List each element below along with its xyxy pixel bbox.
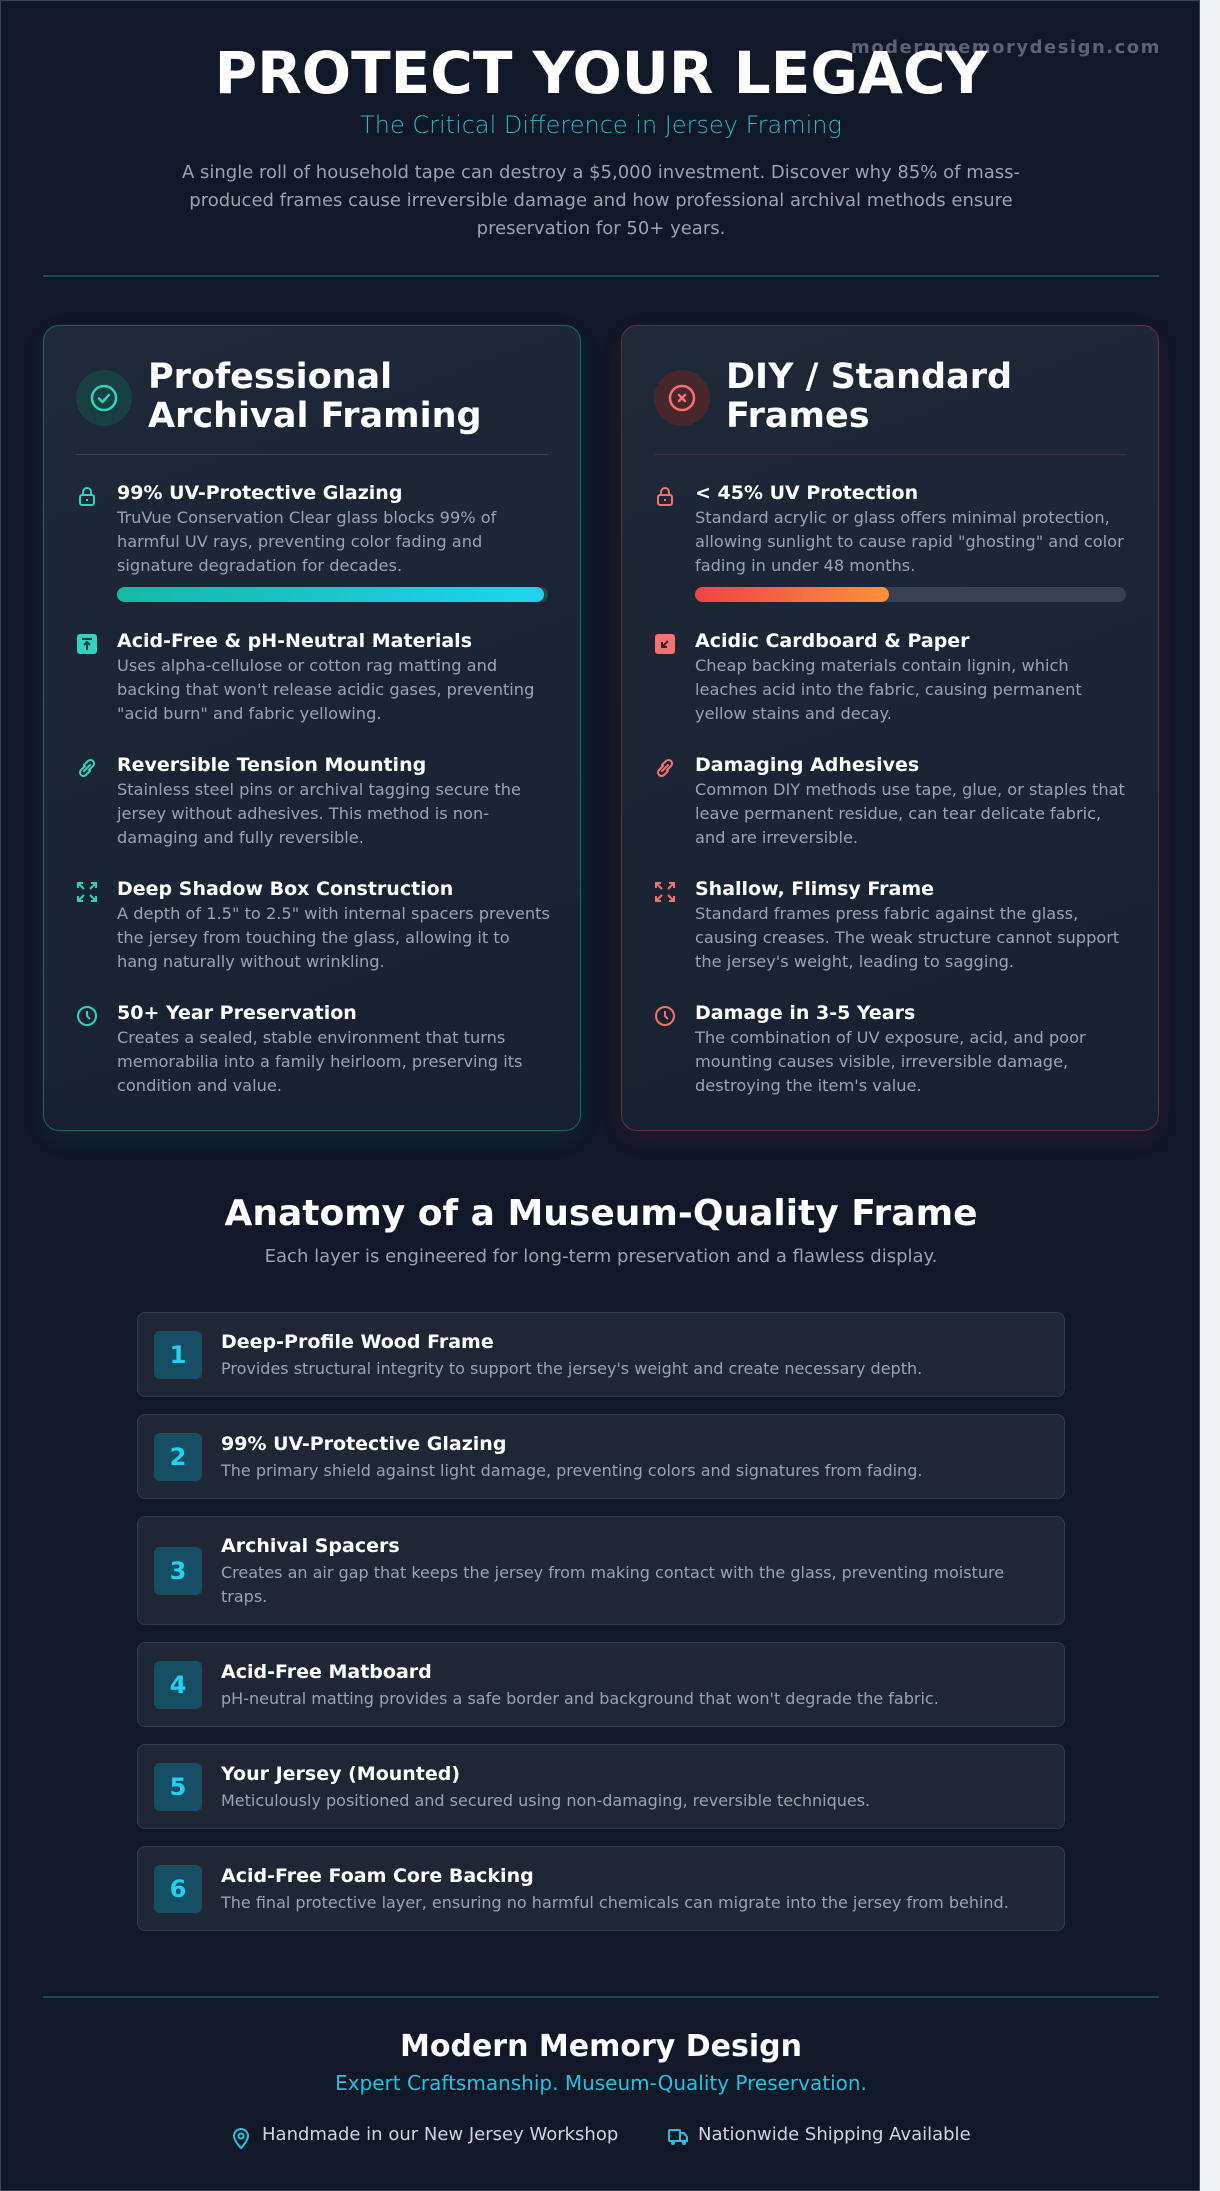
item: shadow box: A depth of 1.5" to 2.5" with internal spacers prevents the jersey from touching the glass, allowing it to hang naturally without wrinkling. xyxy=(117,904,550,971)
layer 1: Deep-Profile Wood Frame xyxy=(221,1331,494,1353)
icon: truck xyxy=(668,2129,688,2145)
item: UV glazing: 99% UV-Protective Glazing xyxy=(117,482,402,504)
layer 2 xyxy=(137,1414,1065,1499)
layer 2: 2 xyxy=(170,1443,186,1471)
layer 6 xyxy=(137,1846,1065,1931)
layer 5: Your Jersey (Mounted) xyxy=(221,1763,460,1785)
item: UV glazing: TruVue Conservation Clear glass blocks 99% of harmful UV rays, preventing color fading and signature degradation for decades. xyxy=(117,508,496,575)
icon: x circle xyxy=(654,370,710,426)
icon: check circle xyxy=(76,370,132,426)
layer 2: The primary shield against light damage, preventing colors and signatures from fading. xyxy=(221,1461,922,1480)
footer info row xyxy=(233,2124,971,2150)
item: adhesives: Damaging Adhesives xyxy=(695,754,919,776)
footer info row: Nationwide Shipping Available xyxy=(698,2124,971,2145)
subtitle: The Critical Difference in Jersey Framing xyxy=(360,111,842,139)
layer 6: 6 xyxy=(170,1875,186,1903)
heading: Frames xyxy=(726,396,870,436)
layer 6: The final protective layer, ensuring no harmful chemicals can migrate into the jersey from behind. xyxy=(221,1893,1009,1912)
layer 4: 4 xyxy=(170,1671,186,1699)
heading: Professional xyxy=(148,357,392,397)
item: 50 year: 50+ Year Preservation xyxy=(117,1002,357,1024)
layer 5: Meticulously positioned and secured using non-damaging, reversible techniques. xyxy=(221,1791,870,1810)
layer 4 xyxy=(137,1642,1065,1727)
footer tagline: Expert Craftsmanship. Museum-Quality Preservation. xyxy=(335,2071,867,2095)
panel: professional archival framing xyxy=(43,325,581,1131)
item: 50 year xyxy=(77,1002,522,1095)
layer 3 xyxy=(137,1516,1065,1625)
item: shadow box: Deep Shadow Box Construction xyxy=(117,878,453,900)
item: adhesives: Common DIY methods use tape, glue, or staples that leave permanent residue, can tear delicate fabric, and are irreversible. xyxy=(695,780,1125,847)
item: tension mounting xyxy=(79,754,521,847)
progress bar: 45% xyxy=(695,587,1126,602)
layer 3: Archival Spacers xyxy=(221,1535,400,1557)
layer 1 xyxy=(137,1312,1065,1397)
item: low UV: < 45% UV Protection xyxy=(695,482,918,504)
layer 6: Acid-Free Foam Core Backing xyxy=(221,1865,534,1887)
item: acid-free: Acid-Free & pH-Neutral Materials xyxy=(117,630,472,652)
item: flimsy frame: Shallow, Flimsy Frame xyxy=(695,878,934,900)
item: UV glazing xyxy=(79,482,497,575)
item: flimsy frame: Standard frames press fabric against the glass, causing creases. The weak structure cannot support the jersey's weight, leading to sagging. xyxy=(695,904,1119,971)
item: acidic cardboard xyxy=(655,630,1082,723)
layer 4: pH-neutral matting provides a safe border and background that won't degrade the fabric. xyxy=(221,1689,939,1708)
item: adhesives xyxy=(657,754,1125,847)
item: low UV xyxy=(657,482,1124,575)
heading: Archival Framing xyxy=(148,396,482,436)
heading xyxy=(148,357,482,436)
layer 3: Creates an air gap that keeps the jersey from making contact with the glass, preventing moisture traps. xyxy=(221,1563,1004,1606)
item: acid-free: Uses alpha-cellulose or cotton rag matting and backing that won't release acidic gases, preventing "acid burn" and fabric yellowing. xyxy=(117,656,534,723)
layer 5: 5 xyxy=(170,1773,186,1801)
progress bar: 99% xyxy=(117,587,548,602)
title: PROTECT YOUR LEGACY xyxy=(215,39,987,107)
item: damage: Damage in 3-5 Years xyxy=(695,1002,915,1024)
item: tension mounting: Stainless steel pins or archival tagging secure the jersey without adhesives. This method is non-damaging and fully reversible. xyxy=(117,780,521,847)
layer 2: 99% UV-Protective Glazing xyxy=(221,1433,506,1455)
layer 1: 1 xyxy=(170,1341,186,1369)
footer brand: Modern Memory Design xyxy=(400,2029,802,2064)
layer 4: Acid-Free Matboard xyxy=(221,1661,432,1683)
heading xyxy=(726,357,1012,436)
watermark: modernmemorydesign.com xyxy=(851,37,1161,58)
item: tension mounting: Reversible Tension Mounting xyxy=(117,754,426,776)
item: flimsy frame xyxy=(655,878,1119,971)
layer 5 xyxy=(137,1744,1065,1829)
item: damage xyxy=(655,1002,1086,1095)
item: damage: The combination of UV exposure, acid, and poor mounting causes visible, irreversible damage, destroying the item's value. xyxy=(695,1028,1086,1095)
item: acidic cardboard: Acidic Cardboard & Paper xyxy=(695,630,970,652)
layer 3: 3 xyxy=(170,1557,186,1585)
intro paragraph: A single roll of household tape can destroy a $5,000 investment. Discover why 85% of mass-produced frames cause irreversible damage and how professional archival methods ensure preservation for 50+ years. xyxy=(182,162,1020,239)
item: 50 year: Creates a sealed, stable environment that turns memorabilia into a family heirloom, preserving its condition and value. xyxy=(117,1028,522,1095)
icon: location pin xyxy=(233,2128,249,2150)
heading: DIY / Standard xyxy=(726,357,1012,397)
item: acid-free xyxy=(77,630,534,723)
panel: DIY standard frames xyxy=(621,325,1159,1131)
layer 1: Provides structural integrity to support the jersey's weight and create necessary depth. xyxy=(221,1359,922,1378)
footer info row: Handmade in our New Jersey Workshop xyxy=(262,2124,618,2145)
item: acidic cardboard: Cheap backing materials contain lignin, which leaches acid into the fabric, causing permanent yellow stains and decay. xyxy=(695,656,1082,723)
section subtitle: Each layer is engineered for long-term preservation and a flawless display. xyxy=(265,1246,937,1267)
section heading: anatomy: Anatomy of a Museum-Quality Frame xyxy=(224,1193,978,1234)
item: shadow box xyxy=(77,878,550,971)
item: low UV: Standard acrylic or glass offers minimal protection, allowing sunlight to cause rapid "ghosting" and color fading in under 48 months. xyxy=(695,508,1124,575)
